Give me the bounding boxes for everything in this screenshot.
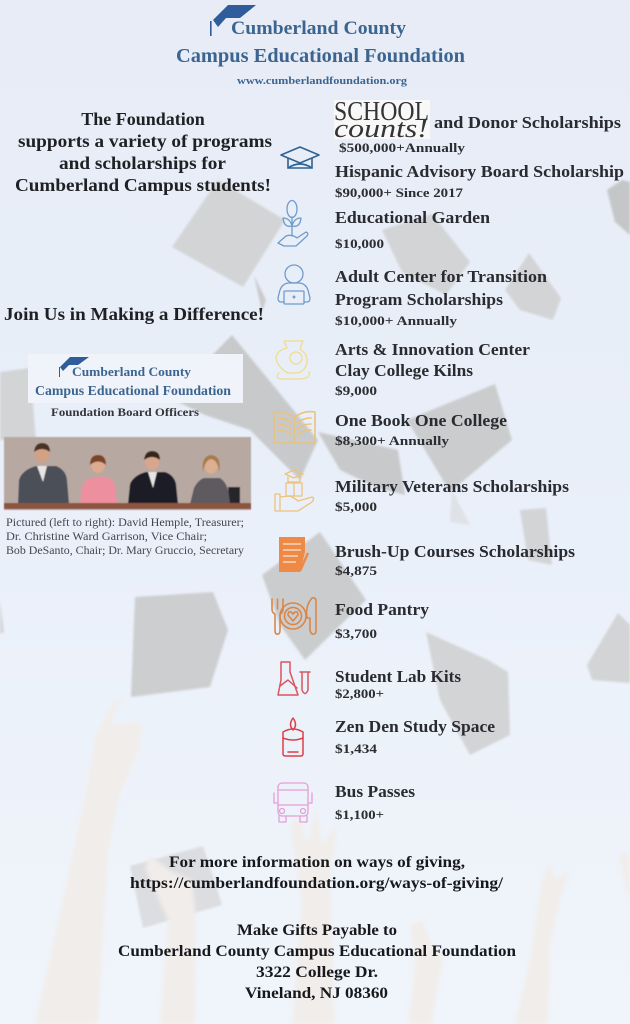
- row: Hispanic Advisory Board Scholarship: [335, 162, 624, 200]
- giving information: [130, 854, 504, 892]
- intro text: The Foundation: [81, 109, 205, 129]
- row: Adult Center for Transition: [335, 267, 548, 328]
- row: Military Veterans Scholarships: Military Veterans Scholarships: [335, 477, 569, 496]
- row: Educational Garden: [335, 208, 491, 251]
- photo: four board officers at table: [4, 437, 251, 510]
- heading: board officers: Foundation Board Officers: [51, 407, 200, 419]
- row: Adult Center for Transition: Program Scholarships: [335, 290, 503, 309]
- icon: hand holding veteran box: [275, 470, 314, 511]
- row: Food Pantry: Food Pantry: [335, 600, 430, 619]
- row: Hispanic Advisory Board Scholarship: $90,000+ Since 2017: [335, 185, 464, 200]
- icon: bus: [274, 783, 312, 822]
- intro text: Cumberland Campus students!: [15, 175, 271, 195]
- row: Adult Center for Transition: $10,000+ Annually: [335, 313, 458, 328]
- row: Military Veterans Scholarships: [335, 477, 569, 514]
- row: Zen Den Study Space: Zen Den Study Space: [335, 717, 495, 736]
- icon: document and pen: [279, 537, 308, 572]
- icon: logo mortarboard: [210, 5, 256, 36]
- row: Brush-Up Courses Scholarships: [335, 542, 575, 578]
- mailing address: Vineland, NJ 08360: [245, 985, 388, 1002]
- panel: funded programs list: [272, 96, 624, 822]
- row: Student Lab Kits: $2,800+: [335, 686, 384, 701]
- row: Student Lab Kits: [335, 667, 461, 701]
- mailing address: [118, 922, 516, 1002]
- logo: School Counts: [334, 96, 430, 143]
- icon: candle: [283, 718, 303, 756]
- small foundation logo: Cumberland County: [72, 364, 192, 379]
- row: Arts and Innovation Center: $9,000: [335, 383, 377, 398]
- row: Student Lab Kits: Student Lab Kits: [335, 667, 461, 686]
- row: Hispanic Advisory Board Scholarship: Hispanic Advisory Board Scholarship: [335, 162, 624, 181]
- row: Brush-Up Courses Scholarships: $4,875: [335, 563, 378, 578]
- row: Brush-Up Courses Scholarships: Brush-Up Courses Scholarships: [335, 542, 575, 561]
- row: Zen Den Study Space: $1,434: [335, 741, 378, 756]
- header logo: Campus Educational Foundation: [176, 45, 465, 67]
- intro text: and scholarships for: [59, 153, 226, 173]
- row: Food Pantry: $3,700: [335, 626, 377, 641]
- small foundation logo: Campus Educational Foundation: [35, 383, 231, 398]
- logo: School Counts: counts!: [334, 114, 428, 143]
- row: Food Pantry: [335, 600, 430, 641]
- header logo: [176, 5, 465, 87]
- call to action: Join Us in Making a Difference!: [4, 304, 264, 324]
- row: School Counts and Donor Scholarships: [334, 96, 621, 155]
- logo: School Counts: SCHOOL: [334, 96, 429, 126]
- header logo: www.cumberlandfoundation.org: [237, 75, 408, 87]
- row: Bus Passes: $1,100+: [335, 807, 384, 822]
- mailing address: Make Gifts Payable to: [237, 922, 397, 939]
- caption: Bob DeSanto, Chair; Dr. Mary Gruccio, Secretary: [6, 545, 244, 557]
- background: thrown graduation caps: [0, 180, 630, 928]
- background: raised hands: [35, 700, 630, 1024]
- row: Educational Garden: $10,000: [335, 236, 384, 251]
- small foundation logo: [28, 354, 243, 403]
- icon: pottery vase: [276, 341, 309, 379]
- row: Zen Den Study Space: [335, 717, 495, 756]
- row: Arts and Innovation Center: [335, 340, 530, 398]
- row: Arts and Innovation Center: Arts & Innovation Center: [335, 340, 530, 359]
- header logo: Cumberland County: [231, 18, 407, 39]
- row: One Book One College: $8,300+ Annually: [335, 433, 450, 448]
- row: School Counts and Donor Scholarships: $500,000+Annually: [339, 140, 466, 155]
- icon: flask and test tube: [278, 662, 310, 695]
- icon: fork plate knife: [272, 598, 316, 634]
- caption: [6, 517, 244, 557]
- caption: Dr. Christine Ward Garrison, Vice Chair;: [6, 531, 207, 543]
- icon: open book: [274, 412, 315, 443]
- icon: graduation cap: [281, 147, 319, 168]
- row: Adult Center for Transition: Adult Center for Transition: [335, 267, 548, 286]
- row: Educational Garden: Educational Garden: [335, 208, 491, 227]
- row: Bus Passes: Bus Passes: [335, 782, 415, 801]
- row: Military Veterans Scholarships: $5,000: [335, 499, 377, 514]
- row: Arts and Innovation Center: Clay College Kilns: [335, 361, 473, 380]
- icon: person at laptop: [278, 265, 310, 304]
- giving information: For more information on ways of giving,: [169, 854, 465, 871]
- icon: plant in hand: [278, 200, 308, 246]
- giving information: https://cumberlandfoundation.org/ways-of-giving/: [130, 875, 504, 892]
- row: One Book One College: One Book One College: [335, 411, 507, 430]
- mailing address: 3322 College Dr.: [256, 964, 378, 981]
- row: Bus Passes: [335, 782, 415, 822]
- intro text: [15, 109, 272, 195]
- caption: Pictured (left to right): David Hemple, Treasurer;: [6, 517, 244, 529]
- intro text: supports a variety of programs: [18, 131, 272, 151]
- row: One Book One College: [335, 411, 507, 448]
- panel: board officers: [4, 354, 251, 557]
- row: School Counts and Donor Scholarships: and Donor Scholarships: [434, 113, 621, 132]
- mailing address: Cumberland County Campus Educational Foundation: [118, 943, 516, 960]
